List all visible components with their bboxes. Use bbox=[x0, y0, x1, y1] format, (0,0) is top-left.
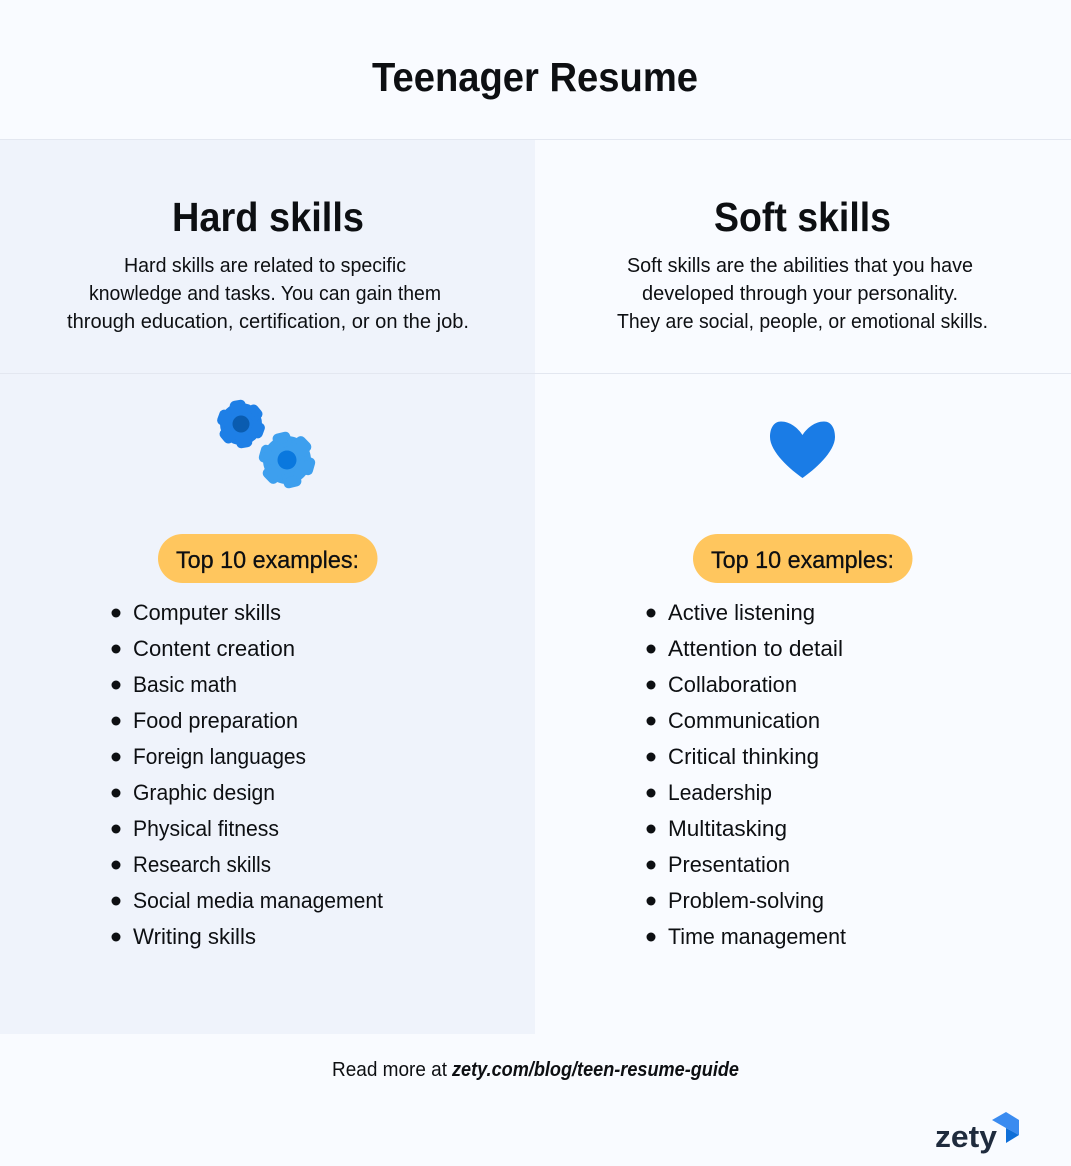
panel: hard skills background bbox=[0, 140, 535, 1034]
badge: top 10 examples (soft) bbox=[693, 534, 912, 583]
icon: gears bbox=[218, 401, 314, 487]
list: hard skills examples bbox=[112, 600, 383, 949]
list: hard skills examples: Graphic design bbox=[133, 780, 275, 805]
hard skills description: Hard skills are related to specific bbox=[124, 255, 406, 277]
list: soft skills examples: Leadership bbox=[668, 780, 772, 805]
panel: soft skills bbox=[617, 194, 988, 949]
heading: hard skills: Hard skills bbox=[172, 194, 364, 240]
list: hard skills examples: Writing skills bbox=[133, 924, 256, 949]
list: soft skills examples: Communication bbox=[668, 708, 820, 733]
title: Teenager Resume bbox=[372, 54, 698, 100]
panel: hard skills bbox=[67, 194, 469, 949]
list: soft skills examples: Presentation bbox=[668, 852, 790, 877]
badge: top 10 examples (hard): Top 10 examples: bbox=[176, 547, 359, 574]
list: hard skills examples: Food preparation bbox=[133, 708, 298, 733]
list: soft skills examples: Critical thinking bbox=[668, 744, 819, 769]
footer: read more link bbox=[332, 1059, 739, 1081]
list: soft skills examples: Collaboration bbox=[668, 672, 797, 697]
icon: heart bbox=[770, 422, 835, 478]
hard skills description: through education, certification, or on the job. bbox=[67, 311, 469, 333]
badge: top 10 examples (soft): Top 10 examples: bbox=[711, 547, 894, 574]
footer: read more link: zety.com/blog/teen-resume-guide bbox=[451, 1059, 739, 1081]
heading: soft skills: Soft skills bbox=[714, 194, 891, 240]
list: hard skills examples: Computer skills bbox=[133, 600, 281, 625]
list: hard skills examples: Physical fitness bbox=[133, 816, 279, 841]
list: hard skills examples: Content creation bbox=[133, 636, 295, 661]
soft skills description: They are social, people, or emotional skills. bbox=[617, 311, 988, 333]
list: soft skills examples: Active listening bbox=[668, 600, 815, 625]
list: hard skills examples: Research skills bbox=[133, 852, 271, 877]
list: hard skills examples: Foreign languages bbox=[133, 744, 306, 769]
list: soft skills examples bbox=[646, 600, 846, 949]
list: hard skills examples: Social media management bbox=[133, 888, 383, 913]
soft skills description: Soft skills are the abilities that you have bbox=[627, 255, 973, 277]
list: hard skills examples: Basic math bbox=[133, 672, 237, 697]
soft skills description bbox=[617, 255, 988, 333]
list: soft skills examples: Problem-solving bbox=[668, 888, 824, 913]
list: soft skills examples: Time management bbox=[668, 924, 846, 949]
soft skills description: developed through your personality. bbox=[642, 283, 958, 305]
logo: zety: zety bbox=[935, 1119, 998, 1154]
badge: top 10 examples (hard) bbox=[158, 534, 378, 583]
list: soft skills examples: Multitasking bbox=[668, 816, 787, 841]
logo: zety bbox=[935, 1112, 1019, 1154]
hard skills description bbox=[67, 255, 469, 333]
list: soft skills examples: Attention to detail bbox=[668, 636, 843, 661]
footer: read more link: Read more at bbox=[332, 1059, 447, 1081]
hard skills description: knowledge and tasks. You can gain them bbox=[89, 283, 441, 305]
